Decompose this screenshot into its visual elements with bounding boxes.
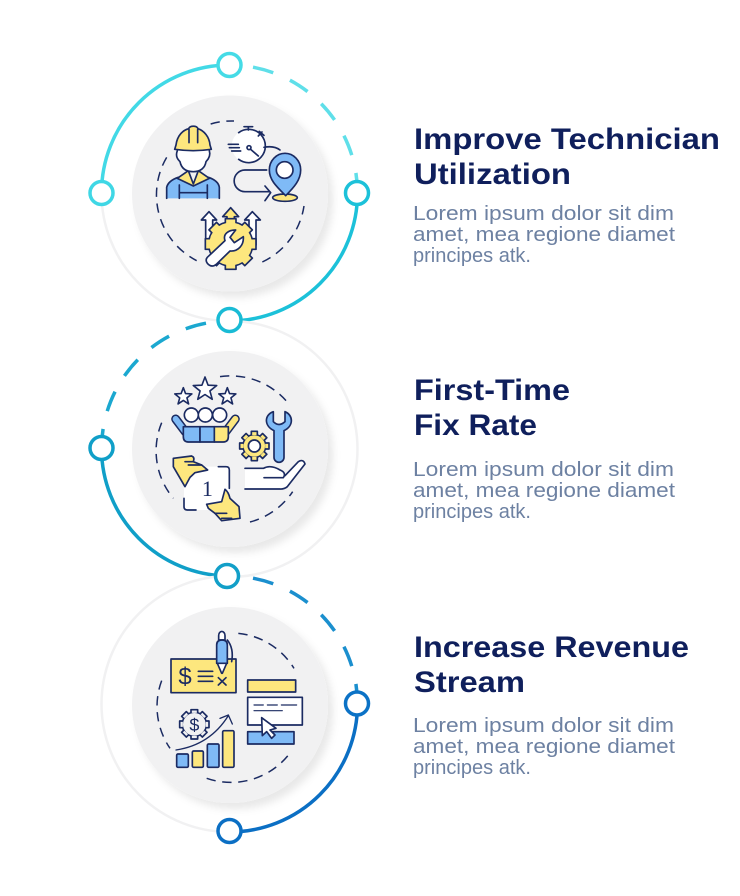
icon: team bbox=[176, 408, 235, 442]
panel: first-time fix rate bbox=[90, 308, 358, 577]
faint ring arc 1 bbox=[102, 193, 230, 321]
text block 2: amet, mea regione diamet bbox=[413, 479, 675, 502]
text block 3: principes atk. bbox=[413, 756, 531, 779]
node top bbox=[218, 308, 241, 332]
text block 1: amet, mea regione diamet bbox=[413, 223, 675, 246]
icon: growth chart and money gear bbox=[176, 710, 234, 767]
dashed inner ring bbox=[156, 121, 304, 262]
dashed arc 1 bbox=[253, 67, 358, 193]
node right bbox=[346, 692, 368, 715]
panel: improve technician utilization bbox=[90, 54, 368, 321]
dashed inner ring bbox=[157, 633, 294, 782]
text block 3: amet, mea regione diamet bbox=[413, 735, 675, 758]
icon group: team rating, service, first bbox=[156, 376, 305, 522]
node left bbox=[90, 436, 113, 460]
icon: worker bbox=[167, 126, 219, 198]
text block 2: Lorem ipsum dolor sit dim bbox=[413, 458, 674, 481]
solid arc left to bottom bbox=[102, 449, 227, 576]
icon: stars bbox=[175, 377, 236, 404]
text block 3: Lorem ipsum dolor sit dim bbox=[413, 714, 674, 737]
node top bbox=[216, 564, 238, 588]
icon group: check, website, growth bbox=[157, 631, 302, 782]
faint ring arc 2 bbox=[230, 321, 358, 577]
text block 1 bbox=[413, 202, 675, 267]
text block 1: Lorem ipsum dolor sit dim bbox=[413, 202, 674, 225]
gray disc 1 bbox=[132, 96, 328, 292]
heading: improve technician utilization: Utilization bbox=[414, 158, 571, 191]
heading: first-time fix rate bbox=[414, 374, 570, 442]
text block 3 bbox=[413, 714, 675, 779]
node bottom bbox=[218, 820, 241, 842]
solid arc top to left bbox=[102, 65, 230, 193]
icon: web page with cursor bbox=[248, 680, 302, 744]
heading: improve technician utilization bbox=[414, 123, 720, 191]
text block 2: principes atk. bbox=[413, 500, 531, 523]
icon: stopwatch bbox=[228, 127, 280, 163]
heading: first-time fix rate: Fix Rate bbox=[414, 409, 537, 442]
icon: growth chart and money gear: $ bbox=[189, 715, 199, 735]
panel: increase revenue stream bbox=[102, 564, 368, 842]
dashed arc 3 bbox=[253, 578, 358, 704]
heading: increase revenue stream: Increase Revenue bbox=[414, 631, 689, 664]
solid arc right to bottom bbox=[230, 704, 358, 832]
solid arc right to bottom bbox=[230, 193, 358, 321]
gray disc 2 bbox=[132, 351, 328, 547]
dashed inner ring bbox=[156, 376, 293, 522]
icon: route and location pin bbox=[234, 153, 301, 201]
icon: number one with framing hands: 1 bbox=[202, 476, 213, 501]
dashed arc 2 bbox=[102, 323, 206, 449]
text block 1: principes atk. bbox=[413, 244, 531, 267]
faint ring arc 3 bbox=[102, 576, 230, 832]
heading: improve technician utilization: Improve Technician bbox=[414, 123, 720, 156]
icon: gear and wrench in hand bbox=[240, 412, 305, 489]
icon: gear with wrench and arrows bbox=[201, 208, 260, 269]
icon: check and pen: $ bbox=[178, 663, 192, 690]
gray disc 3 bbox=[132, 607, 328, 803]
icon: check and pen bbox=[171, 631, 236, 693]
node top bbox=[218, 54, 241, 76]
icon group: worker, stopwatch, location, gear bbox=[156, 121, 304, 269]
node right bbox=[346, 182, 368, 204]
icon: number one with framing hands bbox=[173, 456, 240, 521]
text block 2 bbox=[413, 458, 675, 523]
heading: increase revenue stream: Stream bbox=[414, 666, 525, 699]
heading: increase revenue stream bbox=[414, 631, 689, 699]
heading: first-time fix rate: First-Time bbox=[414, 374, 570, 407]
node left bbox=[90, 182, 113, 204]
